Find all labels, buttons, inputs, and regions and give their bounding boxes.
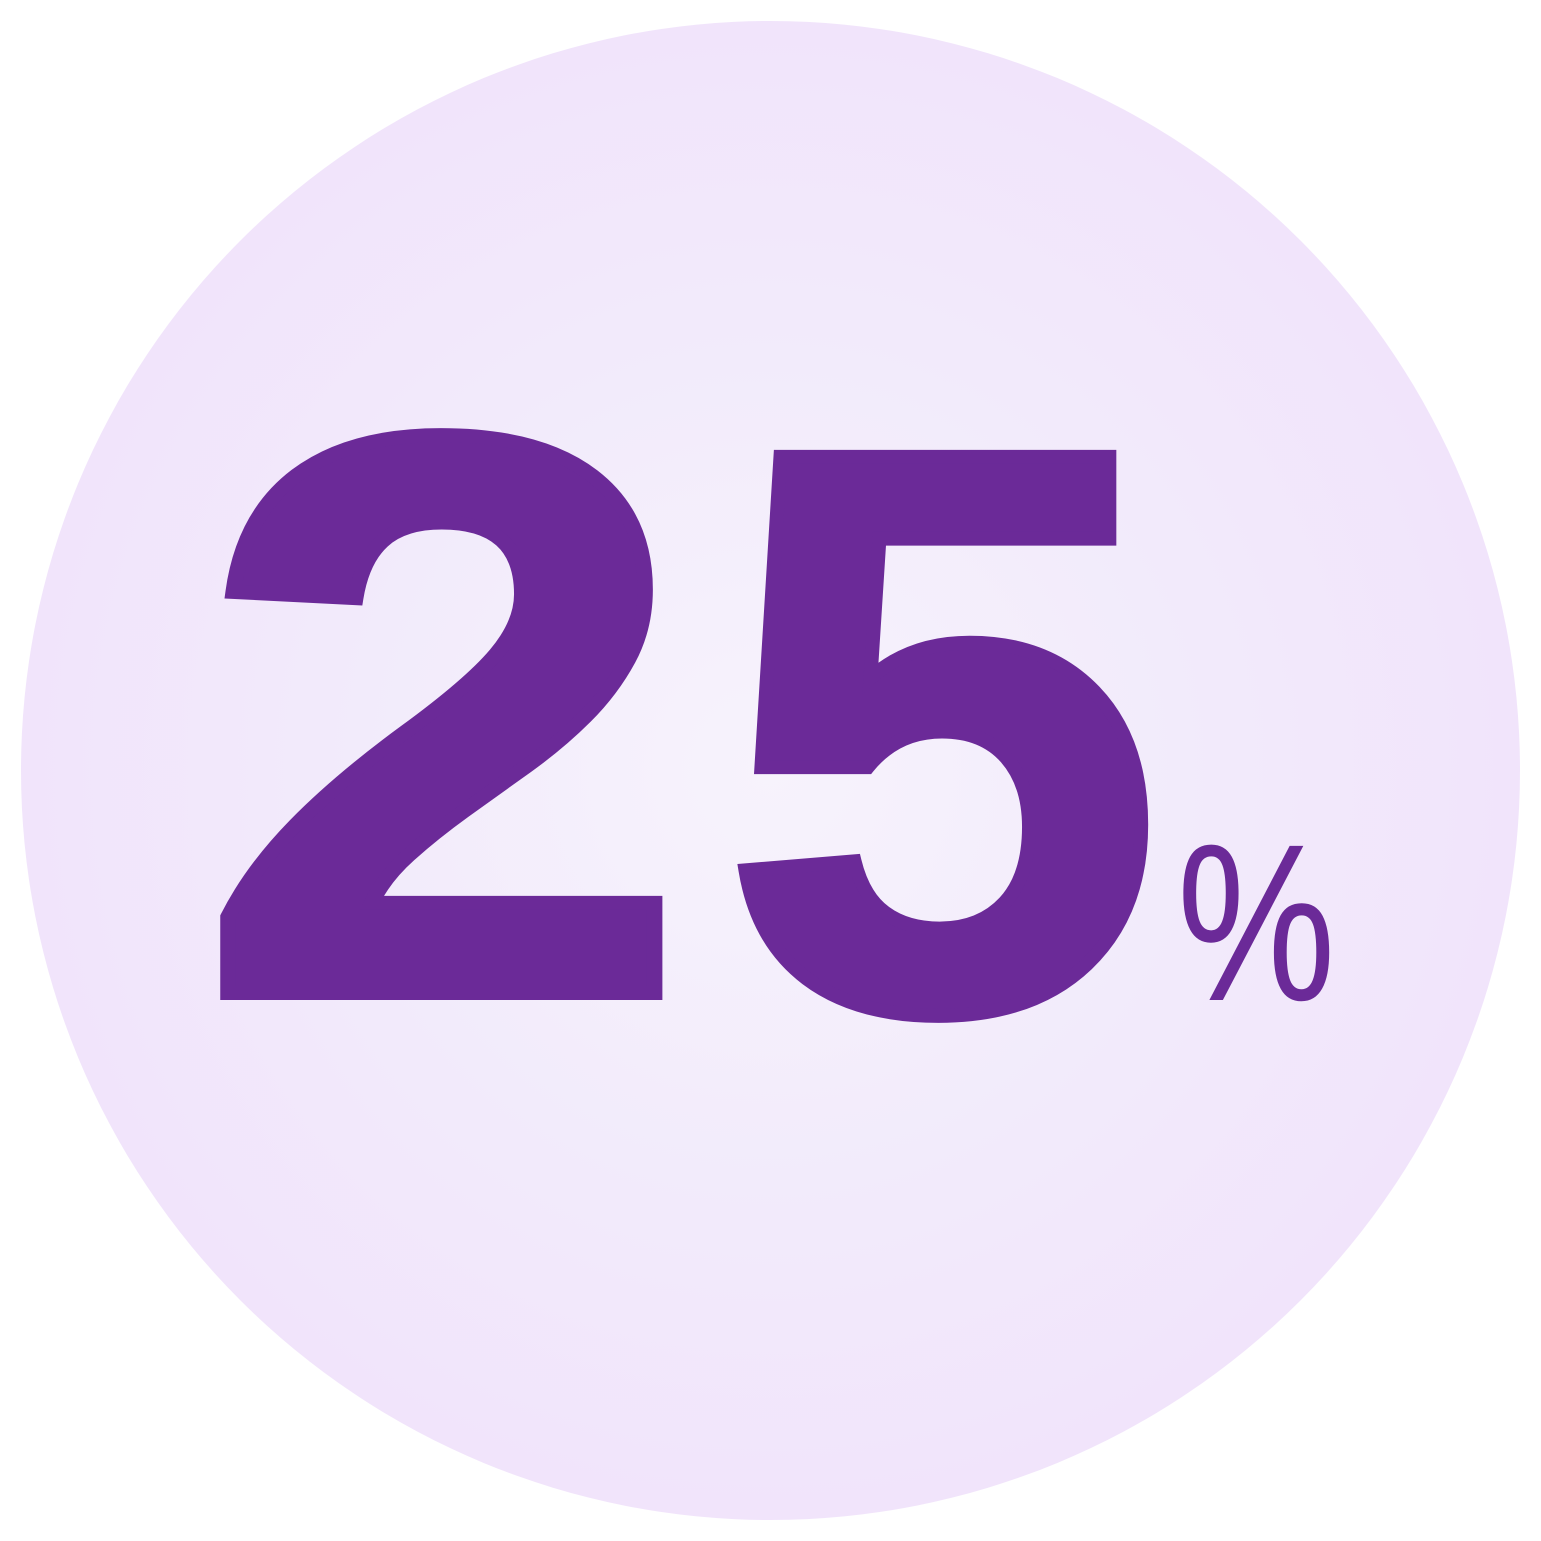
digit 2: 2 xyxy=(197,269,690,1163)
digit 5: 5 xyxy=(721,283,1163,1179)
statistic: 25 percent xyxy=(197,269,1336,1179)
percent sign: % xyxy=(1177,798,1336,1048)
